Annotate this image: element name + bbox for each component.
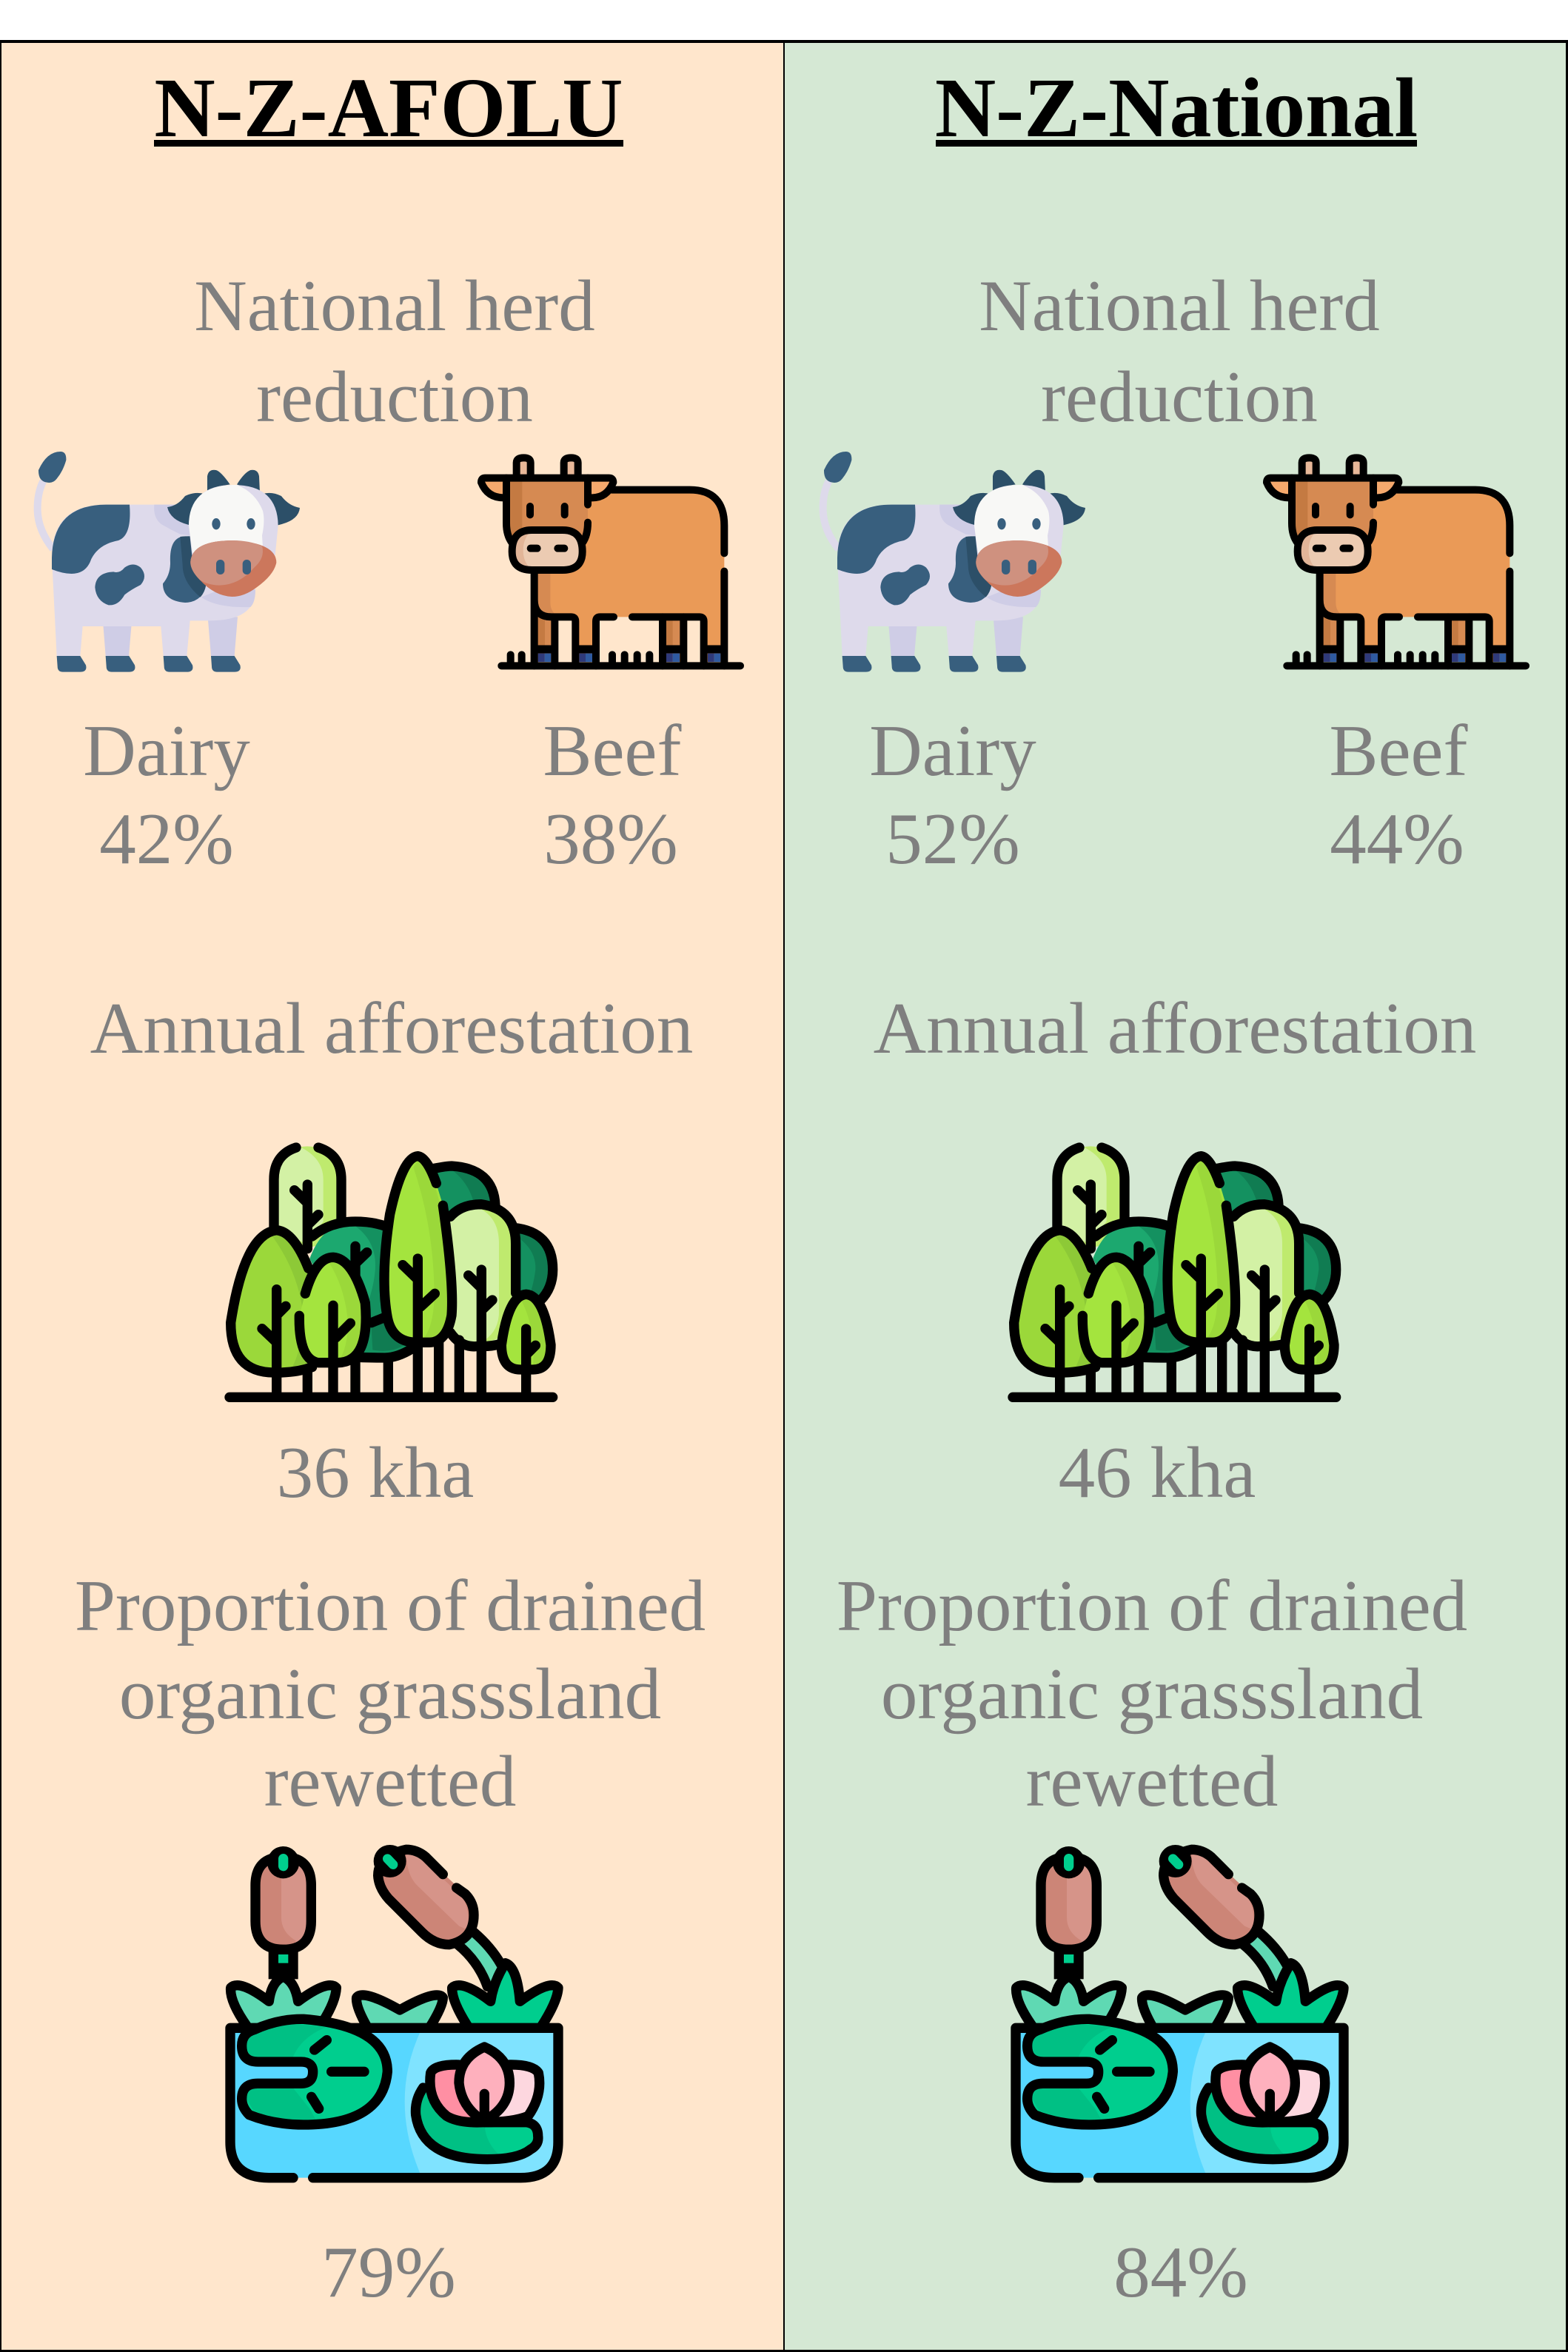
text: beef reduction 38%: 38%	[543, 799, 678, 880]
panel: N-Z-AFOLU	[0, 41, 784, 2351]
text: proportion of drained organic grassland rewetted: rewetted	[264, 1741, 516, 1822]
icon: trees	[1013, 1146, 1336, 1397]
text: national herd reduction: National herd	[194, 266, 595, 346]
text: proportion of drained organic grassland rewetted: Proportion of drained	[75, 1566, 706, 1646]
text: proportion of drained organic grassland rewetted: organic grasssland	[119, 1654, 661, 1735]
icon: beef cow	[481, 458, 740, 666]
text: dairy reduction 42%: Dairy	[83, 711, 250, 791]
text: national herd reduction: reduction	[1041, 357, 1318, 438]
text: proportion of drained organic grassland rewetted: organic grasssland	[881, 1654, 1423, 1735]
text: proportion of drained organic grassland rewetted: Proportion of drained	[837, 1566, 1467, 1646]
text: national herd reduction: National herd	[979, 266, 1380, 346]
text: dairy reduction 52%: 52%	[885, 799, 1020, 880]
icon: dairy cow	[823, 452, 1085, 672]
text: annual afforestation: Annual afforestation	[874, 988, 1476, 1069]
heading: N-Z-AFOLU: N-Z-AFOLU	[154, 61, 623, 155]
icon: dairy cow	[38, 452, 300, 672]
text: dairy reduction 42%: 42%	[99, 799, 234, 880]
panel: N-Z-National	[784, 41, 1568, 2351]
text: dairy reduction 52%: Dairy	[869, 711, 1036, 791]
text: 46 kha: 46 kha	[1059, 1433, 1256, 1513]
icon: wetland pond	[1016, 1845, 1344, 2178]
text: proportion of drained organic grassland rewetted: rewetted	[1026, 1741, 1278, 1822]
text: 36 kha: 36 kha	[277, 1433, 474, 1513]
text: beef reduction 38%: Beef	[543, 711, 681, 791]
icon: beef cow	[1267, 458, 1526, 666]
text: beef reduction 44%: Beef	[1330, 711, 1467, 791]
text: beef reduction 44%: 44%	[1330, 799, 1464, 880]
icon: trees	[229, 1146, 553, 1397]
text: national herd reduction: reduction	[256, 357, 533, 438]
text: annual afforestation: Annual afforestation	[90, 988, 693, 1069]
icon: wetland pond	[230, 1845, 558, 2178]
text: 79%: 79%	[321, 2232, 456, 2313]
heading: N-Z-National: N-Z-National	[935, 61, 1418, 155]
text: 84%: 84%	[1113, 2232, 1248, 2313]
